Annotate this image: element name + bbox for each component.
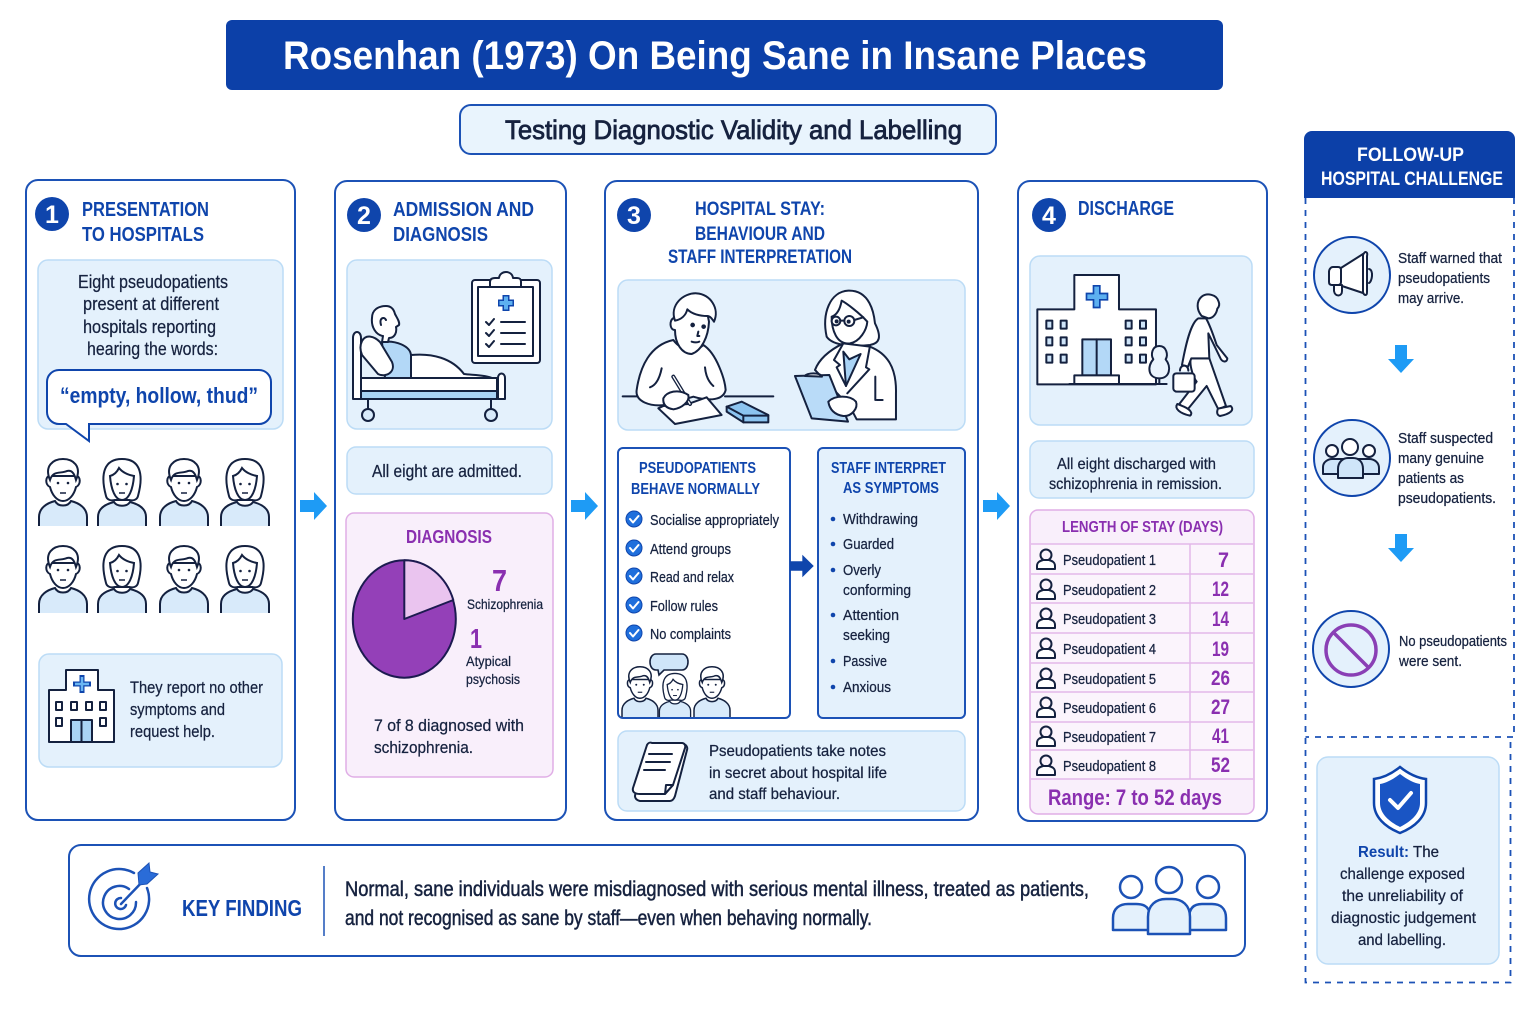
- heading: discharge: DISCHARGE: [1078, 198, 1174, 220]
- result box: [1317, 757, 1499, 964]
- row: pseudopatient 2: Pseudopatient 2: [1063, 583, 1156, 599]
- checklist: Socialise appropriately: [650, 512, 779, 529]
- arrow: step 3 to 4: [983, 492, 1010, 520]
- step: staff warned: [1314, 237, 1502, 313]
- legend: schizophrenia: 7: [492, 563, 507, 598]
- row: pseudopatient 8: 52: [1211, 754, 1230, 777]
- callout: secret notes: [618, 731, 965, 811]
- icon: target with arrow: [89, 863, 158, 929]
- table: length of stay: LENGTH OF STAY (DAYS): [1062, 519, 1223, 536]
- symptom list: Passive: [843, 653, 887, 670]
- symptom list: Guarded: [843, 536, 894, 553]
- text block: result: [1331, 844, 1477, 949]
- step: staff suspected: pseudopatients.: [1398, 491, 1496, 507]
- text block: discharged in remission: All eight discharged with: [1057, 456, 1216, 473]
- text block: eight pseudopatients: present at different: [83, 294, 219, 314]
- arrow: step 2 to 3: [571, 492, 598, 520]
- icon: prohibition sign: [1326, 625, 1376, 675]
- text block: eight pseudopatients: Eight pseudopatients: [78, 272, 228, 292]
- row: pseudopatient 8: Pseudopatient 8: [1063, 759, 1156, 775]
- panel: discharge: [1018, 181, 1267, 821]
- checklist: Follow rules: [650, 598, 718, 615]
- step number 4: [1032, 198, 1066, 232]
- symptom list: [831, 511, 918, 696]
- panel: follow-up hospital challenge: [1304, 131, 1515, 982]
- row: pseudopatient 3: 14: [1212, 608, 1229, 631]
- legend: schizophrenia: [467, 563, 543, 612]
- heading: hospital stay: BEHAVIOUR AND: [695, 224, 825, 245]
- text block: result: diagnostic judgement: [1331, 910, 1477, 927]
- text block: all eight admitted: [347, 447, 552, 494]
- callout: no other symptoms: request help.: [130, 722, 215, 741]
- icon: clipboard: [472, 272, 540, 363]
- subtitle: Testing Diagnostic Validity and Labelling: [505, 115, 962, 145]
- step: no pseudopatients: No pseudopatients: [1399, 634, 1507, 650]
- step: staff warned: may arrive.: [1398, 291, 1464, 307]
- panel: hospital stay: [605, 181, 978, 820]
- diagnosis panel: DIAGNOSIS: [406, 527, 492, 547]
- range: Range: 7 to 52 days: [1048, 785, 1222, 810]
- arrow: step one to two: [1388, 345, 1414, 373]
- legend: atypical psychosis: 1: [470, 623, 482, 654]
- speech bubble: empty, hollow, thud: [47, 370, 271, 441]
- symptom list: Withdrawing: [843, 511, 918, 528]
- row: pseudopatient 5: Pseudopatient 5: [1063, 672, 1156, 688]
- heading: admission and diagnosis: [393, 199, 534, 246]
- row: pseudopatient 7: [1037, 725, 1229, 748]
- callout: secret notes: Pseudopatients take notes: [709, 743, 886, 760]
- symptom list: conforming: [843, 582, 911, 599]
- icon: megaphone: [1329, 252, 1372, 296]
- text block: result: Result:: [1358, 844, 1409, 861]
- speech bubble: empty, hollow, thud: “empty, hollow, thud”: [60, 383, 258, 408]
- symptom list: Anxious: [843, 679, 891, 696]
- symptom list: Overly: [843, 562, 881, 579]
- callout: no other symptoms: [39, 654, 282, 767]
- text block: discharged in remission: schizophrenia in remission.: [1049, 476, 1222, 493]
- row: pseudopatient 8: [1037, 754, 1230, 777]
- table: length of stay: [1030, 510, 1254, 814]
- text block: result: and labelling.: [1358, 932, 1446, 949]
- text block: result: The: [1413, 844, 1439, 861]
- box: staff interpret as symptoms: [818, 448, 965, 718]
- arrow: behaviour to interpretation: [790, 555, 814, 577]
- legend: atypical psychosis: psychosis: [466, 671, 520, 687]
- step: staff suspected: Staff suspected: [1398, 431, 1493, 447]
- icon: group talking: [622, 654, 730, 717]
- heading: presentation to hospitals: [82, 199, 209, 246]
- step number 1: 1: [45, 201, 59, 229]
- row: pseudopatient 5: [1037, 667, 1230, 690]
- heading: hospital stay: HOSPITAL STAY:: [695, 199, 825, 220]
- diagnosis panel: [346, 513, 553, 777]
- illustration: patient writing and doctor with clipboard: [618, 280, 965, 430]
- step: staff suspected: many genuine: [1398, 451, 1484, 467]
- row: pseudopatient 4: Pseudopatient 4: [1063, 642, 1156, 658]
- row: pseudopatient 2: [1037, 578, 1229, 601]
- step: staff warned: pseudopatients: [1398, 271, 1490, 287]
- step number 2: 2: [357, 202, 371, 230]
- row: pseudopatient 7: Pseudopatient 7: [1063, 730, 1156, 746]
- icon: person walking with bag: [1173, 294, 1232, 416]
- subtitle: [460, 105, 996, 154]
- label: key finding: KEY FINDING: [182, 895, 302, 921]
- text block: result: the unreliability of: [1342, 888, 1464, 905]
- checklist: [626, 511, 779, 643]
- step: staff suspected: [1314, 420, 1496, 507]
- row: pseudopatient 5: 26: [1211, 667, 1230, 690]
- legend: atypical psychosis: [466, 623, 520, 687]
- icon: doctor with clipboard: [795, 291, 896, 422]
- text block: key finding statement: Normal, sane individuals were misdiagnosed with serious mental illness, treated as patients,: [345, 878, 1089, 901]
- row: pseudopatient 1: [1037, 549, 1229, 572]
- checklist: Attend groups: [650, 541, 731, 558]
- box: pseudopatients behave normally: BEHAVE NORMALLY: [631, 481, 761, 498]
- symptom list: Attention: [843, 607, 899, 624]
- heading: hospital stay: [668, 199, 852, 268]
- row: pseudopatient 4: [1037, 638, 1229, 661]
- box: staff interpret as symptoms: AS SYMPTOMS: [843, 480, 939, 497]
- heading: admission and diagnosis: DIAGNOSIS: [393, 224, 488, 246]
- icon: three people: [1113, 867, 1226, 934]
- icon: hospital building: [1037, 275, 1169, 384]
- illustration: hospital and person leaving: [1030, 256, 1252, 425]
- checklist: Read and relax: [650, 569, 734, 586]
- legend: atypical psychosis: Atypical: [466, 653, 511, 669]
- row: pseudopatient 3: Pseudopatient 3: [1063, 612, 1156, 628]
- step: no pseudopatients: were sent.: [1398, 654, 1462, 670]
- text block: all eight admitted: All eight are admitted.: [372, 461, 522, 481]
- checklist: No complaints: [650, 626, 731, 643]
- step: staff suspected: patients as: [1398, 471, 1464, 487]
- row: pseudopatient 6: Pseudopatient 6: [1063, 701, 1156, 717]
- step number 4: 4: [1042, 202, 1056, 230]
- illustration: patient in bed with clipboard: [347, 260, 552, 429]
- heading: hospital stay: STAFF INTERPRETATION: [668, 247, 852, 268]
- arrow: step 1 to 2: [300, 492, 327, 520]
- row: pseudopatient 7: 41: [1212, 725, 1229, 748]
- row: pseudopatient 6: 27: [1211, 696, 1230, 719]
- callout: no other symptoms: They report no other: [130, 678, 263, 697]
- text block: eight pseudopatients: hearing the words:: [87, 339, 218, 359]
- icon: eight pseudopatients: [39, 459, 269, 613]
- header: follow-up hospital challenge: [1304, 131, 1515, 198]
- pie chart: 7 schizophrenia, 1 atypical: [353, 560, 456, 678]
- icon: group of people: [1323, 439, 1379, 478]
- legend: schizophrenia: Schizophrenia: [467, 596, 543, 612]
- step number 2: [347, 198, 381, 232]
- step: no pseudopatients: [1313, 611, 1507, 687]
- step number 3: 3: [627, 202, 641, 230]
- panel: key finding: [69, 845, 1245, 956]
- heading: presentation to hospitals: PRESENTATION: [82, 199, 209, 221]
- text block: key finding statement: [345, 878, 1089, 930]
- row: pseudopatient 3: [1037, 608, 1229, 631]
- callout: no other symptoms: symptoms and: [130, 700, 225, 719]
- text block: eight pseudopatients: [38, 260, 283, 429]
- callout: secret notes: in secret about hospital life: [709, 765, 887, 782]
- heading: admission and diagnosis: ADMISSION AND: [393, 199, 534, 221]
- title: [226, 20, 1223, 90]
- step number 1: [35, 197, 69, 231]
- symptom list: seeking: [843, 627, 890, 644]
- arrow: step two to three: [1388, 534, 1414, 562]
- icon: patient writing: [623, 293, 773, 424]
- box: pseudopatients behave normally: [618, 448, 790, 718]
- text block: key finding statement: and not recognised as sane by staff—even when behaving normally.: [345, 907, 872, 930]
- heading: presentation to hospitals: TO HOSPITALS: [82, 224, 204, 246]
- diagnosis panel: schizophrenia.: [374, 738, 473, 757]
- icon: notebook: [633, 743, 687, 801]
- step number 3: [617, 198, 651, 232]
- row: pseudopatient 4: 19: [1212, 638, 1229, 661]
- text block: discharged in remission: [1030, 441, 1254, 498]
- row: pseudopatient 2: 12: [1212, 578, 1229, 601]
- header: follow-up hospital challenge: FOLLOW-UP: [1357, 144, 1464, 166]
- panel: presentation to hospitals: [26, 180, 295, 820]
- box: staff interpret as symptoms: STAFF INTERPRET: [831, 460, 946, 477]
- icon: patient in bed: [353, 306, 505, 421]
- icon: hospital: [49, 670, 114, 742]
- panel: admission and diagnosis: [335, 181, 566, 820]
- text block: result: challenge exposed: [1340, 866, 1465, 883]
- step: staff warned: Staff warned that: [1398, 251, 1502, 267]
- title: Rosenhan (1973) On Being Sane in Insane Places: [283, 34, 1147, 78]
- row: pseudopatient 1: Pseudopatient 1: [1063, 553, 1156, 569]
- row: pseudopatient 1: 7: [1218, 549, 1229, 572]
- text block: eight pseudopatients: hospitals reporting: [83, 317, 216, 337]
- box: pseudopatients behave normally: PSEUDOPATIENTS: [639, 460, 756, 477]
- callout: secret notes: and staff behaviour.: [709, 786, 840, 803]
- diagnosis panel: 7 of 8 diagnosed with: [374, 716, 524, 735]
- row: pseudopatient 6: [1037, 696, 1230, 719]
- icon: shield with check: [1374, 767, 1426, 833]
